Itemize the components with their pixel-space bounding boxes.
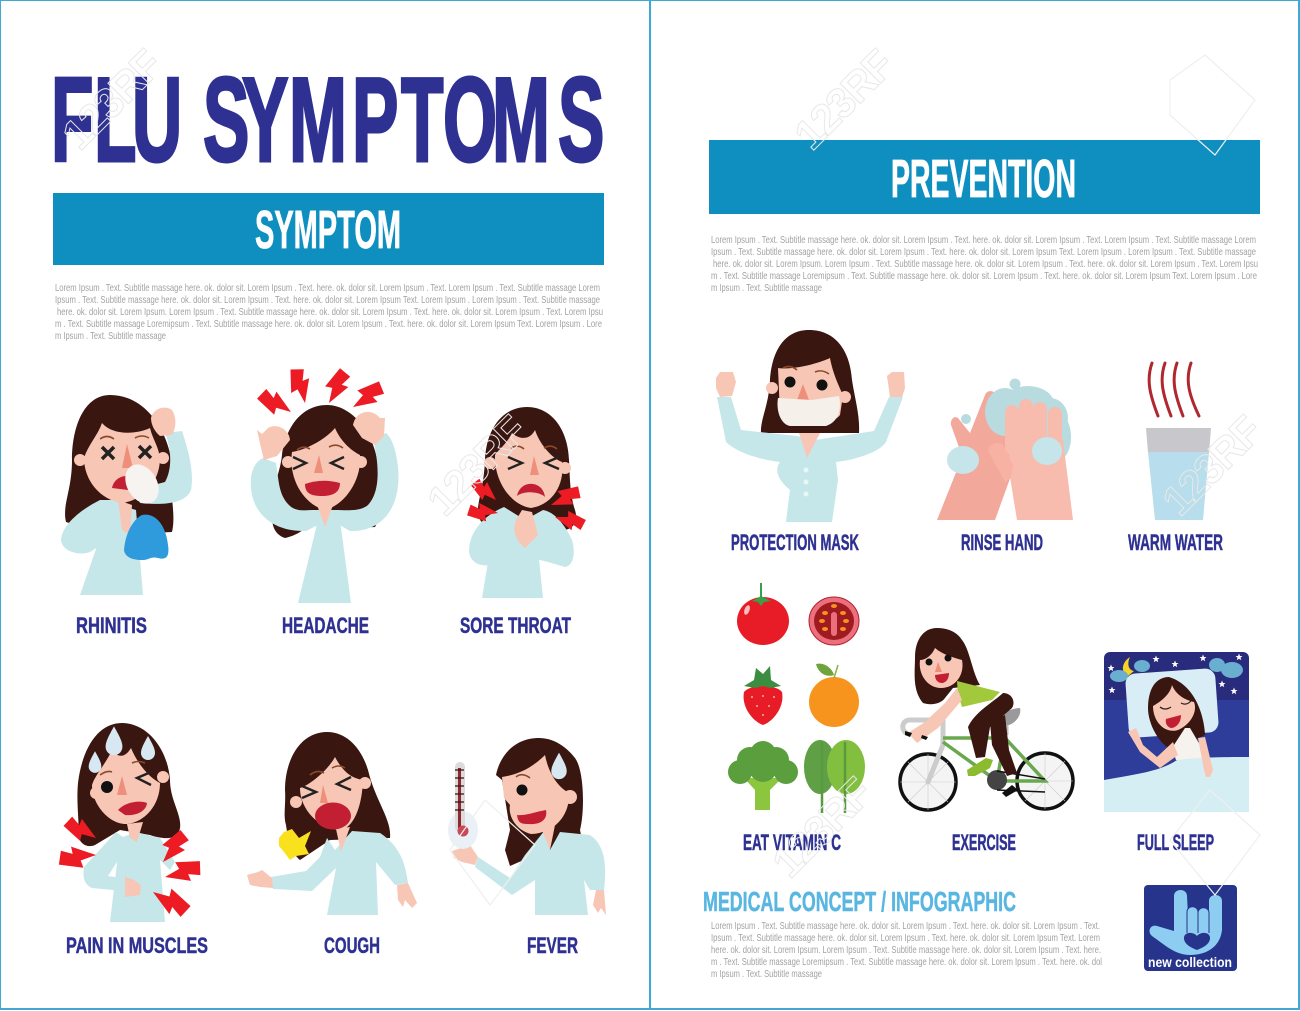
symptom body text: Lorem Ipsum . Text. Subtitle massage here. ok. dolor sit. Lorem Ipsum . Text. here. ok. dolor sit. Lorem Ipsum . Text. Lorem Ipsum . Text. Subtitle massage Lorem (55, 282, 600, 294)
figure: rhinitis (61, 395, 192, 595)
footer body text: here. ok. dolor sit. Lorem Ipsum. Lorem Ipsum . Text. Subtitle massage here. ok. dolor sit. Lorem Ipsum . Text. here. (711, 944, 1101, 956)
subheading: medical concept: MEDICAL CONCEPT / INFOGRAPHIC (703, 886, 1016, 917)
label: EXERCISE (952, 830, 1016, 855)
icon: night sky (1108, 654, 1243, 694)
watermarks: 123RF (1153, 406, 1271, 524)
label: COUGH (324, 933, 380, 958)
logo: new collection: new collection (1148, 954, 1232, 970)
figure: pain in muscles (57, 723, 204, 922)
figure: exercise cyclist (900, 628, 1073, 810)
panel: symptom heading band (53, 193, 604, 265)
icon: sweat drop (551, 753, 567, 779)
watermarks: 123RF (418, 406, 536, 524)
label: HEADACHE (282, 613, 369, 638)
label: RINSE HAND (961, 530, 1043, 555)
label: RHINITIS (76, 613, 147, 638)
label: PAIN IN MUSCLES (66, 933, 208, 958)
icon: tomato (737, 583, 789, 645)
left hand (937, 391, 1012, 520)
icon: cut tomato (809, 597, 859, 645)
prevention body text (711, 234, 1258, 294)
label: FEVER (527, 933, 578, 958)
icon: sweat drops (89, 726, 155, 773)
label: FULL SLEEP (1137, 830, 1214, 855)
icon: tissue (119, 458, 165, 510)
symptom body text: m Ipsum . Text. Subtitle massage (55, 330, 166, 342)
icon: blue cloth (124, 515, 168, 560)
figure: protection mask (716, 330, 905, 522)
panel: symptom heading band: SYMPTOM (255, 200, 401, 260)
figure: headache (251, 366, 398, 603)
footer body text: m Ipsum . Text. Subtitle massage (711, 968, 822, 980)
watermarks: 123RF (763, 768, 881, 886)
icon: bicycle (900, 708, 1073, 810)
icon: hands on head (257, 426, 290, 460)
label: EAT VITAMIN C (743, 830, 841, 855)
icon: face mask (778, 396, 840, 426)
icon: strawberry (744, 666, 782, 725)
panel: prevention heading band: PREVENTION (891, 149, 1076, 209)
label: PROTECTION MASK (731, 530, 859, 555)
symptom body text: Ipsum . Text. Subtitle massage here. ok. dolor sit. Lorem Ipsum . Text. here. ok. dolor sit. Lorem Ipsum Text. Lorem Ipsum . Lorem Ipsum . Text. Subtitle massage (55, 294, 600, 306)
symptom body text: here. ok. dolor sit. Lorem Ipsum. Lorem Ipsum . Text. Subtitle massage here. ok. dolor sit. Lorem Ipsum . Text. here. ok. dolor sit. Lorem Ipsum . Text. Lorem Ipsu (57, 306, 603, 318)
label: SORE THROAT (460, 613, 571, 638)
logo: new collection (1144, 885, 1237, 971)
figure: cough (247, 732, 417, 915)
icon: broccoli (728, 741, 798, 810)
figure: full sleep (1104, 652, 1249, 812)
figure: sore throat (467, 407, 587, 598)
figure: warm water glass (1146, 363, 1211, 520)
figure: fever (448, 738, 606, 915)
figure: vitamin c foods (728, 583, 865, 813)
footer body text: Lorem Ipsum . Text. Subtitle massage here. ok. dolor sit. Lorem Ipsum . Text. here. ok. dolor sit. Lorem Ipsum . Text. (711, 920, 1100, 932)
watermarks: 123RF (785, 40, 903, 158)
prevention body text: m Ipsum . Text. Subtitle massage (711, 282, 822, 294)
icon: thermometer (448, 762, 478, 849)
figure: rinse hand (937, 378, 1073, 520)
label: WARM WATER (1128, 530, 1223, 555)
title: FLU SYMPTOMS (51, 52, 604, 187)
foam (961, 378, 1071, 459)
panel: prevention heading band (709, 140, 1260, 214)
watermarks: 123RF (53, 40, 171, 158)
right hand (1005, 399, 1073, 520)
icon: yellow cough puff (279, 829, 311, 860)
footer body text (711, 920, 1102, 980)
icon: orange (809, 664, 859, 727)
symptom body text (55, 282, 603, 342)
icon: dizzy eyes (102, 446, 151, 459)
footer body text: m . Text. Subtitle massage Loremipsum . Text. Subtitle massage here. ok. dolor sit. Lorem Ipsum . Text. here. ok. dol (711, 956, 1102, 968)
footer body text: Ipsum . Text. Subtitle massage here. ok. dolor sit. Lorem Ipsum . Text. here. ok. dolor sit. Lorem Ipsum Text. Lorem (711, 932, 1100, 944)
icon: spinach (804, 740, 865, 813)
symptom body text: m . Text. Subtitle massage Loremipsum . Text. Subtitle massage here. ok. dolor sit. Lorem Ipsum . Text. here. ok. dolor sit. Lorem Ipsum Text. Lorem Ipsum . Lore (55, 318, 602, 330)
